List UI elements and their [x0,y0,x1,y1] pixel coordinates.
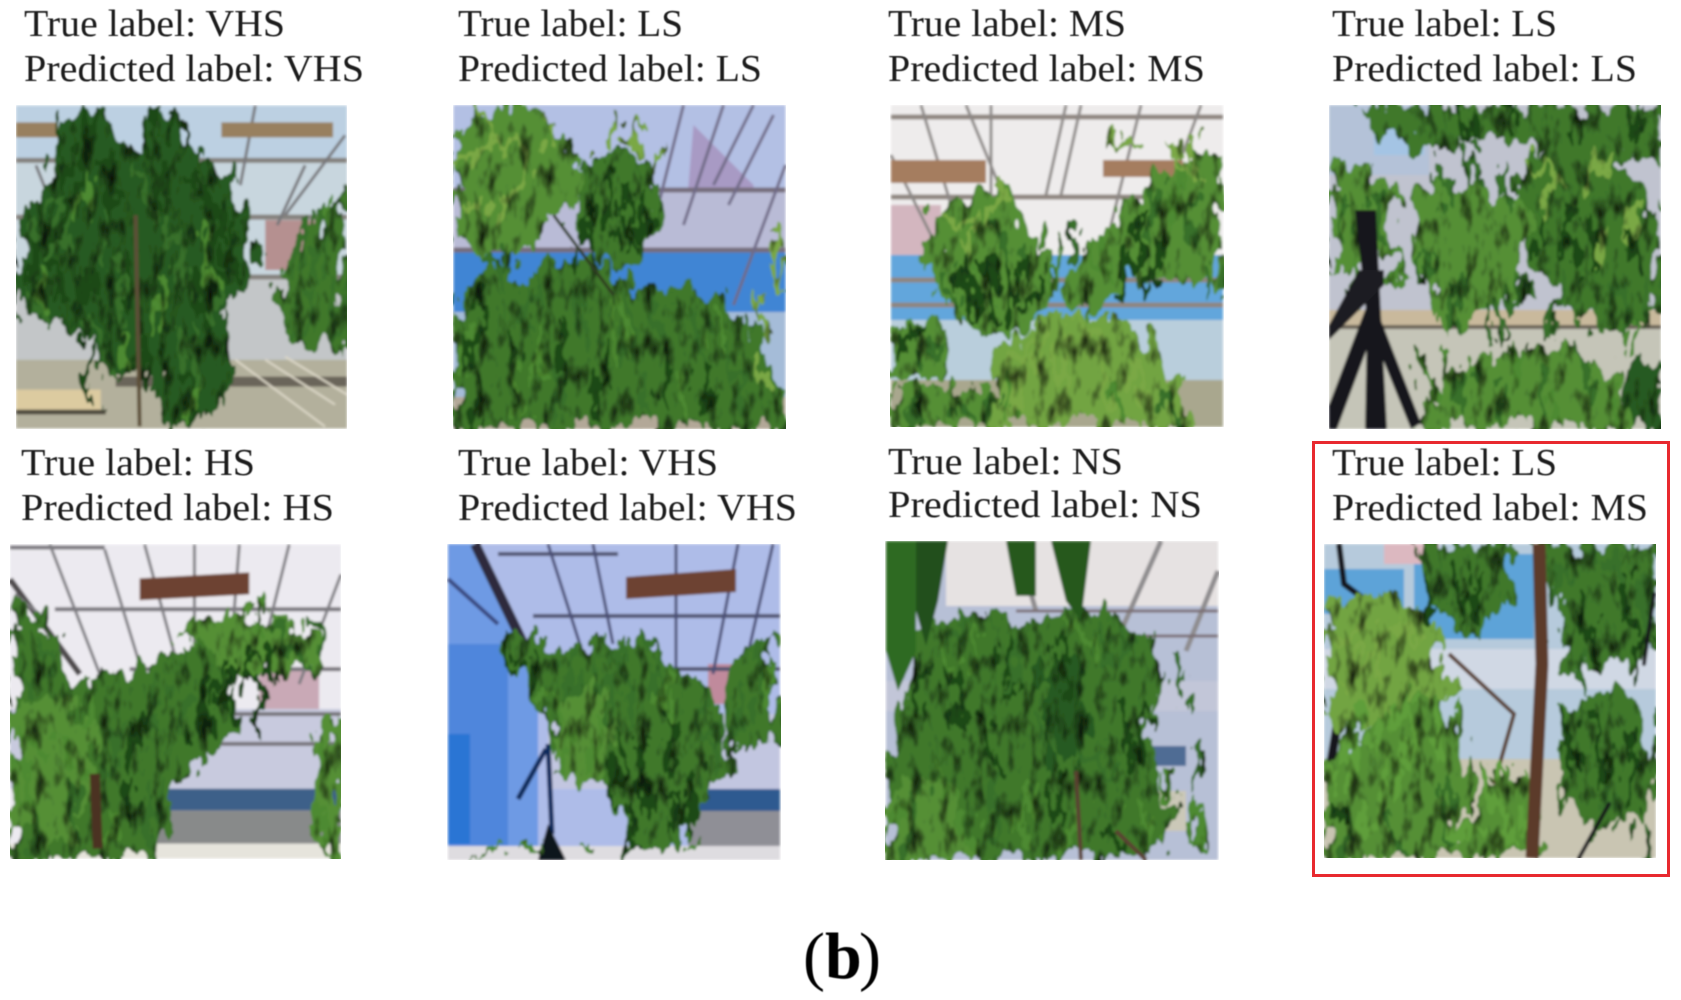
label: true and predicted LS [458,3,762,90]
label: true and predicted HS: Predicted label: HS [21,487,334,529]
label: true and predicted NS: Predicted label: NS [888,484,1202,526]
photo: light green tree against blue greenhouse wall [453,105,786,429]
label: true and predicted NS [888,441,1202,526]
label: true and predicted LS: Predicted label: LS [458,48,762,90]
photo: dark green peach tree in greenhouse [16,105,347,429]
label: true and predicted LS: True label: LS [1332,3,1557,45]
caption: sub-figure label (b): ( [803,920,825,993]
caption: sub-figure label (b): b [825,920,862,993]
panel: LS correct prediction with tripod, row 1 column 4 [1329,3,1661,429]
label: true and predicted MS: Predicted label: MS [888,48,1205,90]
label: true and predicted LS: Predicted label: LS [1332,48,1637,90]
panel: VHS correct prediction, row 2 column 2 [448,442,797,860]
label: true and predicted MS: True label: MS [888,3,1126,45]
label: true LS predicted MS: Predicted label: MS [1332,487,1648,529]
label: true and predicted MS [888,3,1205,90]
label: true and predicted VHS: Predicted label: VHS [458,487,797,529]
label: true and predicted NS: True label: NS [888,441,1123,483]
label: true and predicted VHS: True label: VHS [24,3,285,45]
photo: bright green drooping leaves with brown trunk [1324,544,1656,858]
label: true and predicted LS: True label: LS [458,3,683,45]
label: true and predicted VHS: Predicted label: VHS [24,48,364,90]
label: true and predicted HS [21,442,334,529]
panel: VHS correct prediction, row 1 column 1 [16,3,364,429]
caption: sub-figure label (b): ) [859,920,881,993]
panel: misclassified LS as MS, row 2 column 4, with red box [1314,442,1668,876]
label: true LS predicted MS: True label: LS [1332,442,1557,484]
label: true and predicted VHS: True label: VHS [458,442,718,484]
label: true and predicted VHS [458,442,797,529]
label: true and predicted HS: True label: HS [21,442,255,484]
panel: LS correct prediction, row 1 column 2 [454,3,786,429]
photo: bright green branches under greenhouse roof [890,105,1224,427]
photo: tree leaning from the left under bright roof [10,544,341,859]
label: true LS predicted MS [1332,442,1648,529]
panel: HS correct prediction, row 2 column 1 [10,442,341,859]
panel: MS correct prediction, row 1 column 3 [888,3,1223,427]
panel: NS correct prediction, row 2 column 3 [886,441,1218,860]
highlight: red error box [1314,442,1668,876]
label: true and predicted LS [1332,3,1637,90]
photo: dense healthy foliage [885,541,1219,860]
label: true and predicted VHS [24,3,364,90]
photo: green leaves with black camera tripod [1329,105,1661,429]
photo: tree against strong blue greenhouse wall [447,544,781,860]
